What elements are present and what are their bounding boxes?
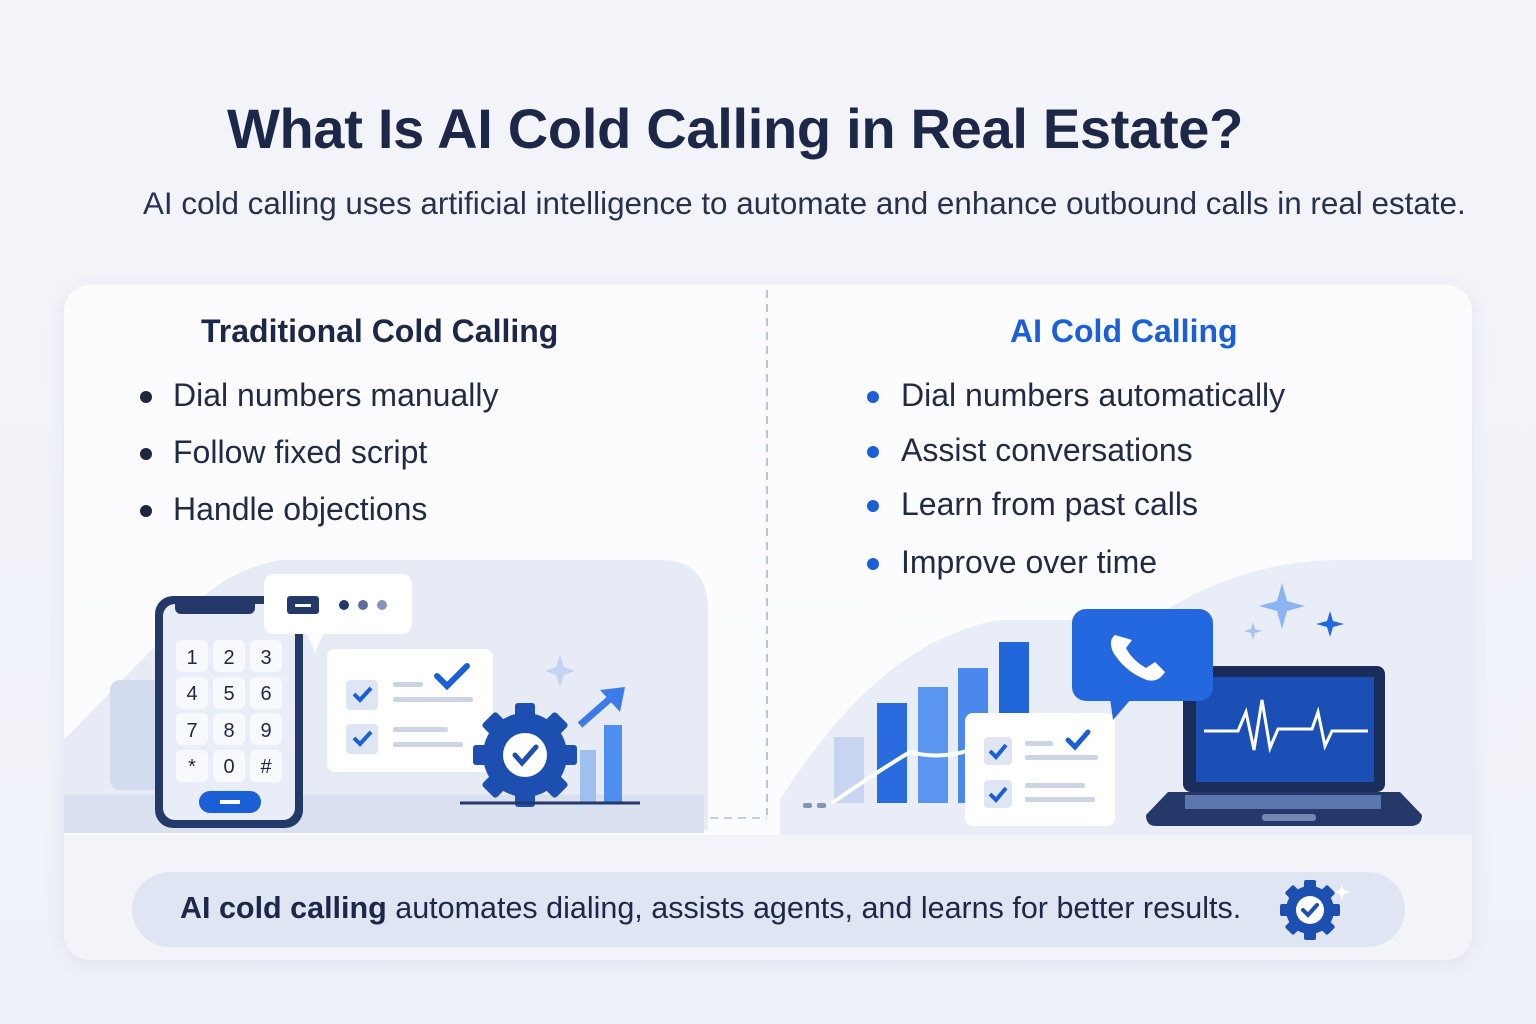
- left bullet list: [140, 377, 498, 527]
- panel: comparison card: [64, 285, 1472, 960]
- checklist: [965, 713, 1115, 826]
- left heading: Traditional Cold Calling: [201, 313, 558, 349]
- right heading: AI Cold Calling: [1010, 313, 1238, 349]
- phone: 0: [223, 756, 235, 778]
- phone: #: [260, 756, 272, 778]
- summary pill: [132, 872, 1405, 947]
- right bullet list: Assist conversations: [901, 432, 1193, 468]
- phone: 9: [260, 720, 272, 742]
- right bullet list: Dial numbers automatically: [901, 377, 1285, 413]
- laptop: [1146, 666, 1422, 826]
- phone bubble: [1072, 609, 1213, 720]
- phone: 8: [223, 720, 235, 742]
- phone: 7: [186, 720, 198, 742]
- left bullet list: Follow fixed script: [173, 434, 427, 470]
- phone: 4: [186, 683, 198, 705]
- background hills: [64, 560, 708, 830]
- phone: 6: [260, 683, 272, 705]
- phone: 5: [223, 683, 235, 705]
- phone: [155, 596, 303, 828]
- left bullet list: Handle objections: [173, 491, 427, 527]
- illustration: AI calling: [803, 583, 1422, 826]
- bars and arrow: [580, 750, 596, 802]
- title: What Is AI Cold Calling in Real Estate?: [227, 97, 1243, 160]
- phone: 1: [186, 647, 198, 669]
- phone: *: [188, 756, 196, 778]
- right bullet list: Improve over time: [901, 544, 1157, 580]
- sparkles: [1259, 583, 1305, 629]
- illustration: traditional calling: [155, 574, 640, 828]
- icon: gear check: [1280, 880, 1350, 940]
- right bullet list: [867, 377, 1285, 580]
- right bullet list: Learn from past calls: [901, 486, 1198, 522]
- speech bubble: [264, 574, 412, 652]
- phone: 2: [223, 647, 235, 669]
- gear: [451, 681, 599, 829]
- subtitle: AI cold calling uses artificial intelligence to automate and enhance outbound calls in real estate.: [143, 186, 1466, 221]
- summary pill: AI cold calling automates dialing, assists agents, and learns for better results.: [180, 891, 1241, 925]
- left bullet list: Dial numbers manually: [173, 377, 498, 413]
- bar chart: [803, 642, 1029, 808]
- phone: 3: [260, 647, 272, 669]
- checklist: [327, 649, 493, 772]
